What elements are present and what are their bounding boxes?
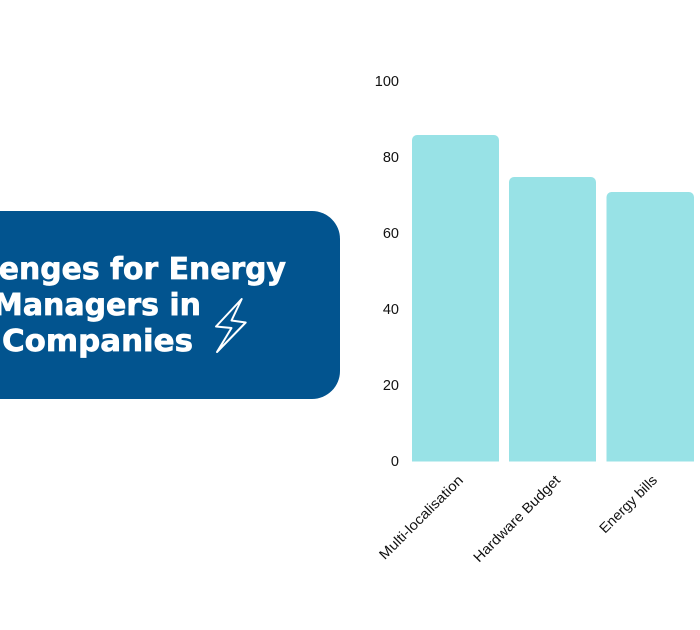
y axis labels: 60 xyxy=(383,226,399,242)
y axis labels: 0 xyxy=(391,454,399,470)
title xyxy=(0,252,286,359)
bar: Hardware Budget xyxy=(509,177,596,462)
y axis labels: 40 xyxy=(383,302,399,318)
y axis labels: 20 xyxy=(383,378,399,394)
y axis labels xyxy=(375,74,399,470)
icon: lightning bolt xyxy=(216,299,246,352)
bar: Energy bills xyxy=(606,192,694,462)
x axis labels: Hardware Budget xyxy=(470,472,563,565)
y axis labels: 100 xyxy=(375,74,399,90)
bar: Multi-localisation xyxy=(412,135,499,462)
bar chart xyxy=(375,74,694,565)
title: Companies xyxy=(2,324,193,359)
x axis labels: Multi-localisation xyxy=(376,472,466,562)
y axis labels: 80 xyxy=(383,150,399,166)
panel: title banner xyxy=(0,211,340,399)
x axis labels xyxy=(376,472,660,565)
x axis labels: Energy bills xyxy=(596,472,660,536)
